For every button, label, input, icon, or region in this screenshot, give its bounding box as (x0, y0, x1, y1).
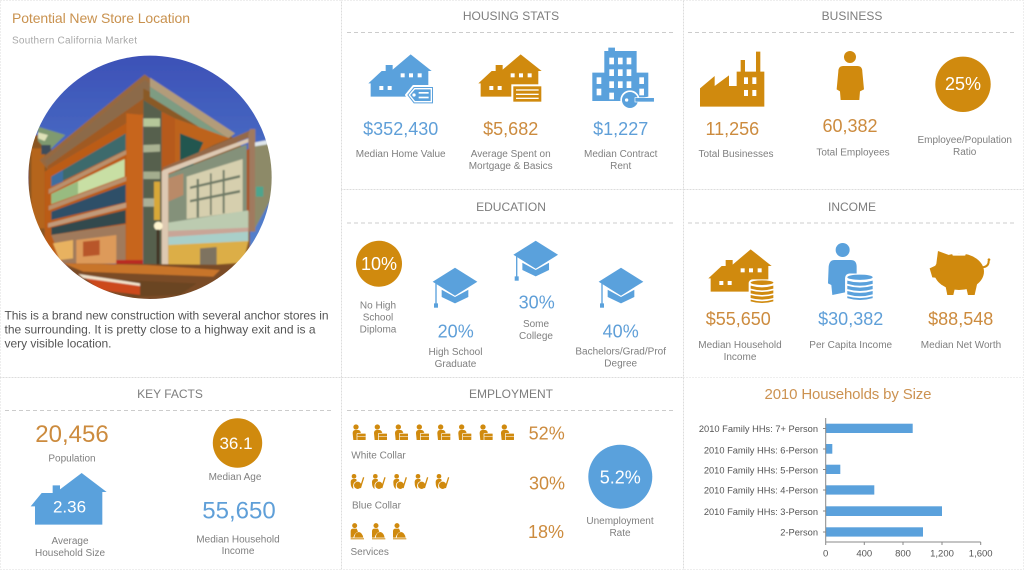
subtitle: Southern California Market (12, 36, 137, 46)
heading: BUSINESS (822, 9, 882, 23)
stat: median household income (196, 498, 280, 557)
bar chart: 2010 Family HHs: 4-Person (704, 486, 818, 496)
panel: income (684, 190, 1024, 378)
stat: high school graduate: High School (429, 347, 482, 358)
stat: median household income: 55,650 (202, 498, 276, 525)
stat: median household income: Income (222, 546, 255, 557)
stat: employee population ratio: Ratio (953, 147, 977, 158)
bar chart: 2-Person (780, 528, 818, 538)
stat: median age: 36.1 (219, 434, 253, 453)
stat: unemployment rate: Unemployment (586, 516, 654, 527)
stat: median household income (698, 309, 782, 363)
stat: total employees: 60,382 (822, 116, 878, 136)
description text: the surrounding. It is pretty close to a highway exit and is a (4, 322, 316, 336)
description text: This is a brand new construction with several anchor stores in (4, 308, 328, 322)
stat: total businesses: Total Businesses (698, 149, 774, 160)
stat: some college: Some (523, 319, 549, 330)
stat: median contract rent (584, 119, 658, 172)
stat: per capita income (809, 309, 893, 351)
icon row: blue collar (351, 474, 449, 489)
stat: median contract rent: $1,227 (593, 119, 648, 139)
icon: factory (700, 52, 764, 107)
stat: median age (209, 418, 262, 483)
stat: white collar: White Collar (351, 451, 406, 462)
stat: median household income: Median Household (698, 340, 782, 351)
stat: bachelors grad prof degree: 40% (603, 321, 639, 341)
chart title: 2010 Households by Size (764, 386, 932, 403)
stat: median home value (356, 119, 446, 160)
street (63, 263, 247, 300)
panel: education (342, 190, 684, 378)
stat: total businesses (698, 119, 774, 160)
description text (4, 308, 328, 350)
bar chart: 2010 Family HHs: 3-Person (704, 507, 818, 517)
icon row: white collar (353, 424, 514, 440)
bar chart: 2010 Family HHs: 7+ Person (699, 424, 818, 434)
stat: blue collar (352, 474, 565, 512)
stat: no high school diploma: No High (360, 301, 396, 312)
stat: median home value: Median Home Value (356, 149, 446, 160)
icon: person (837, 51, 864, 100)
heading: HOUSING STATS (463, 9, 559, 23)
stat: median net worth: Median Net Worth (921, 340, 1001, 351)
panel: employment (342, 378, 684, 570)
heading: KEY FACTS (137, 387, 203, 401)
icon: piggy bank (930, 251, 990, 295)
bar chart: 0 (823, 549, 828, 560)
stat: average household size (31, 473, 107, 559)
icon: house with coins (708, 249, 774, 304)
stat: high school graduate: 20% (438, 321, 474, 341)
panel: key facts (0, 378, 342, 570)
photo: building at dusk in a circle (28, 56, 272, 299)
panel: 2010 households by size (684, 378, 1024, 570)
stat: median contract rent: Rent (610, 161, 631, 172)
stat: services: Services (350, 547, 389, 558)
stat: high school graduate: Graduate (435, 359, 477, 370)
bar chart (699, 418, 993, 560)
stat: total employees (816, 116, 890, 158)
stat: population (35, 421, 109, 465)
stat: average spent on mortgage: Mortgage & Basics (469, 161, 553, 172)
bar chart: 800 (895, 549, 911, 560)
stat: median age: Median Age (209, 472, 262, 483)
bar chart: 1,200 (930, 549, 954, 560)
stat: average spent on mortgage: Average Spent on (471, 149, 551, 160)
stat: no high school diploma: School (363, 312, 393, 324)
stat: population: Population (48, 454, 96, 465)
stat: no high school diploma (356, 241, 402, 336)
stat: no high school diploma: Diploma (360, 324, 397, 336)
icon row: services (351, 523, 406, 539)
stat: no high school diploma: 10% (361, 254, 397, 274)
stat: average household size: 2.36 (53, 498, 86, 517)
stat: white collar (351, 423, 565, 462)
stat: per capita income: $30,382 (818, 309, 883, 329)
stat: services (350, 522, 564, 558)
bar chart: 2010 Family HHs: 6-Person (704, 445, 818, 455)
stat: median household income: $55,650 (706, 309, 771, 329)
right part of the photo, drawn in local coordinates (143, 78, 273, 271)
stat: white collar: 52% (529, 423, 565, 443)
stat: average household size: Average (51, 536, 89, 547)
stat: average spent on mortgage (469, 119, 553, 172)
stat: median household income: Income (724, 352, 757, 363)
stat: blue collar: Blue Collar (352, 501, 402, 512)
stat: average household size: Household Size (35, 548, 105, 559)
bar chart: 400 (856, 549, 872, 560)
stat: total businesses: 11,256 (705, 119, 759, 139)
stat: unemployment rate: 5.2% (600, 467, 641, 487)
description text: very visible location. (4, 336, 112, 350)
stat: some college: 30% (519, 292, 555, 312)
stat: median net worth: $88,548 (928, 309, 993, 329)
title: Potential New Store Location (12, 10, 190, 26)
left part of the photo, drawn in local coordinates (28, 74, 155, 268)
panel: housing stats (342, 0, 684, 190)
stat: employee population ratio: 25% (945, 74, 981, 94)
icon: apartment building with key (592, 48, 654, 110)
panel: business (684, 0, 1024, 190)
heading: EMPLOYMENT (469, 387, 554, 401)
heading: EDUCATION (476, 200, 546, 214)
stat: per capita income: Per Capita Income (809, 340, 893, 351)
stat: unemployment rate: Rate (609, 528, 631, 539)
icon: graduation cap, bachelors (599, 268, 643, 308)
stat: employee population ratio: Employee/Population (917, 135, 1012, 146)
stat: bachelors grad prof degree (575, 321, 666, 370)
stat: median home value: $352,430 (363, 119, 438, 139)
icon: graduation cap, some college (513, 241, 558, 281)
stat: high school graduate (429, 321, 482, 370)
icon: graduation cap, high school (433, 268, 477, 308)
heading: INCOME (828, 200, 876, 214)
stat: average spent on mortgage: $5,682 (483, 119, 538, 139)
stat: bachelors grad prof degree: Degree (604, 358, 638, 370)
stat: some college: College (519, 331, 553, 342)
stat: employee population ratio (917, 57, 1012, 158)
icon: house with price tag (368, 54, 434, 104)
bar chart: 1,600 (969, 549, 993, 560)
stat: median contract rent: Median Contract (584, 149, 658, 160)
stat: unemployment rate (586, 445, 654, 539)
stat: total employees: Total Employees (816, 148, 890, 158)
panel: potential new store location (0, 0, 342, 378)
icon: house with check (478, 54, 542, 103)
bar chart: 2010 Family HHs: 5-Person (704, 466, 818, 476)
stat: population: 20,456 (35, 421, 109, 448)
stat: median net worth (921, 309, 1001, 351)
icon: person with coins (828, 243, 873, 301)
stat: some college (519, 292, 555, 342)
stat: services: 18% (528, 522, 564, 542)
stat: median household income: Median Household (196, 534, 280, 545)
stat: bachelors grad prof degree: Bachelors/Grad/Prof (575, 346, 666, 358)
stat: blue collar: 30% (529, 474, 565, 494)
